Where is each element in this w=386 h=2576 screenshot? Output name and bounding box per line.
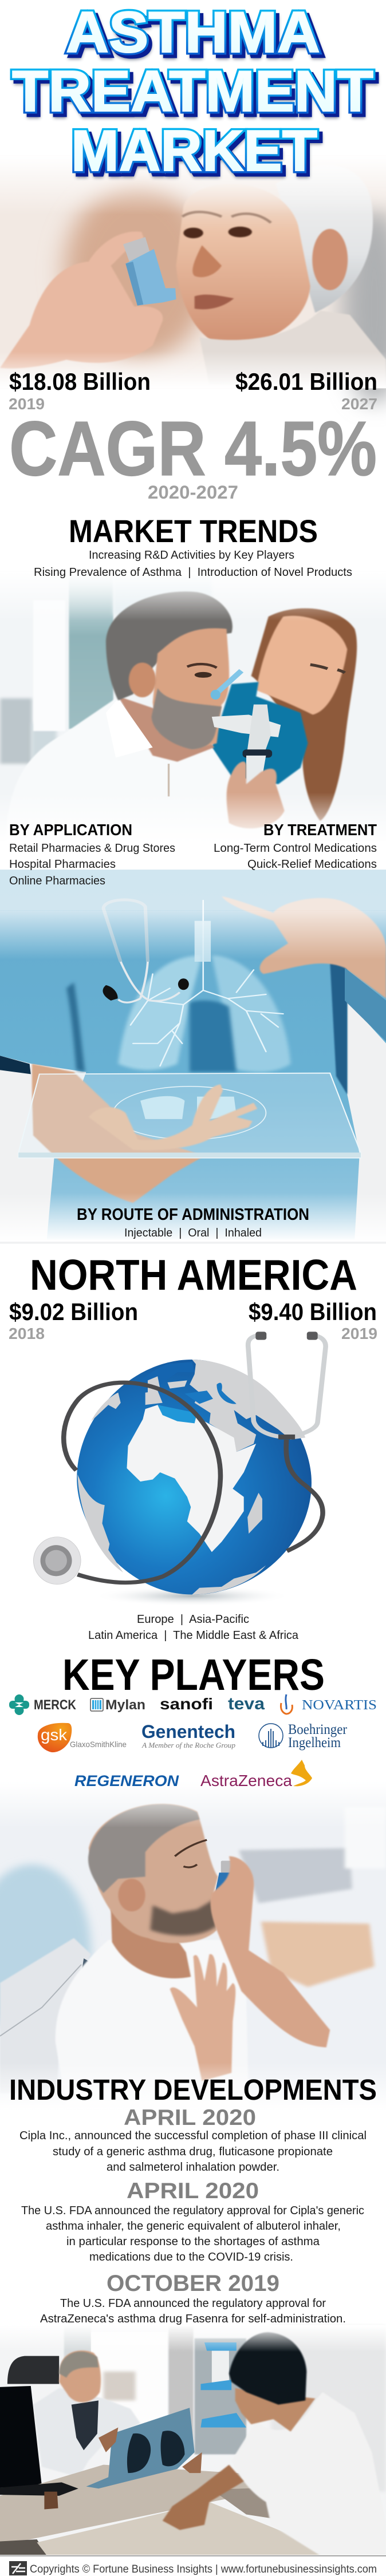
- stethoscope: [118, 962, 180, 1002]
- key players heading: KEY PLAYERS: [62, 1650, 325, 1700]
- heading: BY TREATMENT: [263, 821, 377, 839]
- north america figures: [9, 1298, 377, 1342]
- photo: woman with inhaler: [0, 155, 386, 405]
- logo: GSK: GlaxoSmithKline: [70, 1740, 127, 1749]
- hair: [276, 165, 373, 313]
- year 2019: 2019: [9, 395, 45, 413]
- title line: ASTHMA: ASTHMA: [66, 1, 320, 65]
- photo: young man using inhaler: [0, 1783, 386, 2109]
- hand: [0, 232, 163, 369]
- footer: [0, 2555, 386, 2576]
- description: [21, 2204, 364, 2263]
- development: October 2019: [40, 2271, 346, 2325]
- items: [214, 841, 377, 871]
- description: Cipla Inc., announced the successful completion of phase III clinical: [19, 2129, 367, 2142]
- segment: by treatment: [214, 821, 377, 871]
- x-ray film: [86, 2408, 195, 2488]
- land europe: [138, 1362, 195, 1386]
- market trends text: Increasing R&D Activities by Key Players: [89, 548, 294, 562]
- title line: ASTHMA: ASTHMA: [69, 6, 324, 70]
- logo: Mylan: Mylan: [105, 1697, 145, 1713]
- arm with hand: [210, 1856, 330, 2047]
- man face: [153, 628, 229, 749]
- shelves: [195, 2338, 246, 2455]
- market trends text: [34, 548, 352, 579]
- title line: MARKET: MARKET: [71, 119, 317, 183]
- scrubs: [0, 870, 386, 1240]
- title line: TREATMENT: TREATMENT: [12, 60, 373, 124]
- development: April 2020 FDA approval: [21, 2179, 364, 2263]
- description: AstraZeneca's asthma drug Fasenra for self-administration.: [40, 2312, 346, 2325]
- man neck: [118, 696, 214, 762]
- title line: MARKET: MARKET: [74, 124, 321, 188]
- items: Injectable | Oral | Inhaled: [124, 1226, 262, 1239]
- logo: Genentech: Genentech: [141, 1721, 235, 1742]
- date: APRIL 2020: [127, 2179, 259, 2203]
- logo: Teva: teva: [228, 1694, 265, 1713]
- shirt: [56, 1940, 249, 2108]
- date: APRIL 2020: [124, 2105, 256, 2130]
- logo: AstraZeneca: AstraZeneca: [200, 1772, 292, 1789]
- headset: [248, 1336, 326, 1437]
- patient arm: [163, 2465, 244, 2530]
- description: [40, 2297, 346, 2325]
- segment: by route of administration: [77, 1206, 309, 1239]
- logo: Sanofi: sanofi: [160, 1695, 213, 1713]
- tube ring: [64, 1382, 220, 1583]
- icon: globe with stethoscope: [33, 1332, 326, 1606]
- items: Online Pharmacies: [9, 874, 105, 887]
- nurse hair: [251, 609, 357, 821]
- hand on tablet: [89, 1084, 257, 1150]
- pointing hand: [222, 896, 386, 998]
- segment: by application: [9, 821, 175, 887]
- logo: Genentech: A Member of the Roche Group: [141, 1741, 236, 1749]
- other regions: Europe | Asia-Pacific: [137, 1613, 249, 1626]
- title line: ASTHMA: ASTHMA: [69, 4, 324, 68]
- heading: BY ROUTE OF ADMINISTRATION: [77, 1206, 309, 1224]
- north america figures: $9.02 Billion: [9, 1298, 138, 1325]
- inhaler: [221, 1861, 233, 1873]
- man hair: [106, 591, 233, 701]
- nose clip: [214, 671, 241, 696]
- value 2019: $18.08 Billion: [9, 368, 151, 395]
- description: The U.S. FDA announced the regulatory approval for Cipla's generic: [21, 2204, 364, 2217]
- man beard: [151, 688, 222, 749]
- market trends text: Rising Prevalence of Asthma | Introduction of Novel Products: [34, 566, 352, 579]
- north america figures: $9.40 Billion: [249, 1298, 377, 1325]
- man shirt: [5, 698, 286, 846]
- logo: Merck: MERCK: [34, 1697, 77, 1713]
- sofa left: [0, 1938, 91, 2093]
- title: [12, 1, 377, 188]
- market trends heading: MARKET TRENDS: [69, 513, 318, 549]
- chair: [7, 2356, 59, 2384]
- items: Quick-Relief Medications: [247, 858, 377, 871]
- development: April 2020 Cipla trial: [19, 2105, 367, 2174]
- south america: [77, 1475, 123, 1573]
- items: Hospital Pharmacies: [9, 858, 116, 871]
- logo: Novartis: NOVARTIS: [302, 1698, 377, 1713]
- items: Retail Pharmacies & Drug Stores: [9, 841, 175, 855]
- land left edge: [91, 1393, 121, 1421]
- description: The U.S. FDA announced the regulatory approval for: [60, 2297, 326, 2310]
- monitor: [0, 2386, 42, 2487]
- sweater: [199, 311, 386, 388]
- north america figures: 2019: [341, 1325, 377, 1342]
- globe shadow: [93, 1586, 290, 1606]
- logo: Regeneron: REGENERON: [74, 1772, 179, 1789]
- globe: [77, 1360, 312, 1594]
- other regions: Latin America | The Middle East & Africa: [88, 1629, 299, 1642]
- logo: GSK: gsk: [41, 1726, 68, 1744]
- tablet: [18, 1073, 361, 1158]
- title line: TREATMENT: TREATMENT: [15, 63, 377, 127]
- logo: AstraZeneca: [200, 1760, 312, 1789]
- north america figures: 2018: [9, 1325, 45, 1342]
- market size figures: [9, 368, 377, 413]
- lungs: [118, 955, 202, 1070]
- hand: [227, 761, 285, 828]
- doctor coat: [33, 2388, 140, 2477]
- logo: Boehringer Ingelheim: Boehringer: [288, 1722, 348, 1737]
- description: asthma inhaler, the generic equivalent of albuterol inhaler,: [46, 2219, 341, 2233]
- heading: BY APPLICATION: [9, 821, 132, 839]
- year 2027: 2027: [341, 395, 377, 413]
- items: [9, 841, 175, 887]
- logo: Merck: [9, 1694, 77, 1715]
- doctor head: [59, 2350, 101, 2403]
- logo: Boehringer Ingelheim: Ingelheim: [288, 1735, 341, 1751]
- date: OCTOBER 2019: [107, 2271, 279, 2296]
- icon: Fortune Business Insights logo: [9, 2561, 27, 2575]
- logo: Boehringer Ingelheim: [259, 1722, 348, 1751]
- nurse scrubs: [212, 682, 308, 784]
- nurse face: [256, 616, 347, 715]
- patient face: [235, 2388, 315, 2432]
- description: [19, 2129, 367, 2174]
- logos: key players: [9, 1694, 377, 1789]
- description: study of a generic asthma drug, fluticasone propionate: [53, 2145, 333, 2158]
- keyboard: [0, 2482, 78, 2496]
- title line: MARKET: MARKET: [74, 123, 321, 187]
- land north: [190, 1360, 305, 1452]
- chest piece: [33, 1537, 81, 1585]
- items: Long-Term Control Medications: [214, 841, 377, 855]
- title line: TREATMENT: TREATMENT: [15, 65, 377, 129]
- land africa: [127, 1405, 256, 1552]
- face: [176, 184, 310, 345]
- CAGR period: 2020-2027: [148, 482, 238, 503]
- description: and salmeterol inhalation powder.: [107, 2160, 279, 2174]
- copyright text: Copyrights © Fortune Business Insights | www.fortunebusinessinsights.com: [30, 2563, 377, 2575]
- white band behind segment text: [0, 841, 386, 869]
- other regions: [88, 1613, 299, 1642]
- madagascar: [247, 1493, 262, 1534]
- antarctica: [192, 1565, 266, 1594]
- inhaler: [123, 237, 150, 262]
- desk: [0, 2465, 271, 2546]
- description: in particular response to the shortages of asthma: [66, 2235, 320, 2248]
- logo: Novartis: [281, 1694, 377, 1714]
- doctor hands: [99, 2427, 202, 2473]
- photo: doctor with lungs hologram: [0, 870, 386, 1244]
- tube to headset: [286, 1440, 323, 1551]
- title line: ASTHMA: ASTHMA: [66, 1, 320, 65]
- north america heading: NORTH AMERICA: [30, 1251, 357, 1299]
- photo: man using spirometer with nurse: [0, 572, 386, 846]
- bronchial tree: [131, 900, 283, 1066]
- chest hand: [170, 1954, 235, 2081]
- beanie: [229, 2332, 306, 2405]
- spirometer: [212, 715, 281, 737]
- value 2027: $26.01 Billion: [235, 368, 377, 395]
- patient sweater: [231, 2392, 386, 2555]
- description: medications due to the COVID-19 crisis.: [89, 2250, 293, 2263]
- neck: [111, 1910, 216, 1978]
- forearm lower: [32, 1064, 204, 1203]
- head: [89, 1804, 218, 1943]
- title line: TREATMENT: TREATMENT: [12, 60, 373, 124]
- title line: MARKET: MARKET: [71, 119, 317, 183]
- photo: doctor showing x-ray to patient: [0, 2325, 386, 2555]
- logo: GSK: [38, 1723, 127, 1752]
